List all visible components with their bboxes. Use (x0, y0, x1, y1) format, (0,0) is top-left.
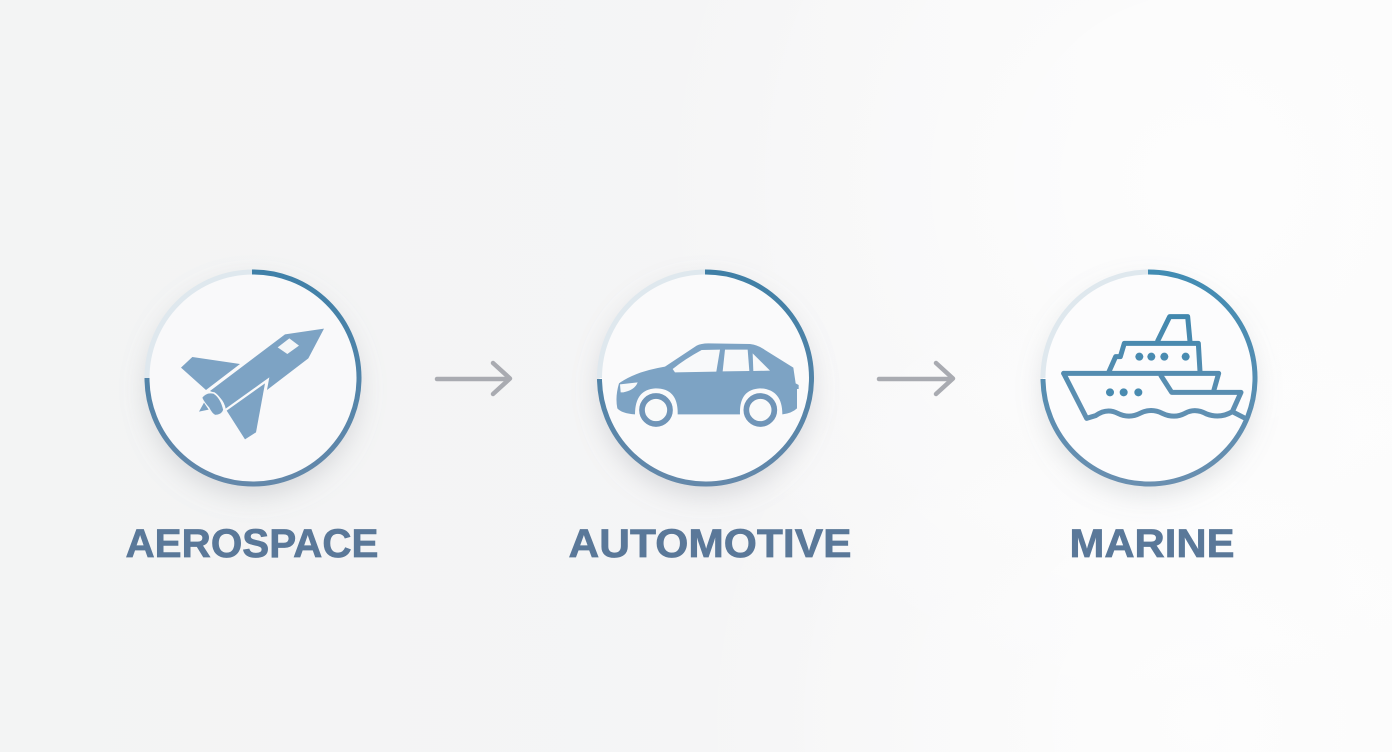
arrow: automotive to marine (879, 363, 953, 394)
progress ring: aerospace (147, 272, 359, 484)
progress ring: marine (1043, 272, 1255, 484)
icon: rocket (181, 329, 324, 439)
label: automotive: AUTOMOTIVE (568, 522, 852, 566)
panel: aerospace (147, 272, 359, 495)
panel: marine (1043, 272, 1255, 495)
panel: automotive (600, 272, 812, 495)
icon: ship (1064, 317, 1244, 418)
label: marine: MARINE (1070, 522, 1234, 566)
icon: car (616, 343, 799, 424)
progress ring: automotive (600, 272, 811, 484)
arrow: aerospace to automotive (437, 363, 510, 394)
label: aerospace: AEROSPACE (126, 522, 378, 566)
